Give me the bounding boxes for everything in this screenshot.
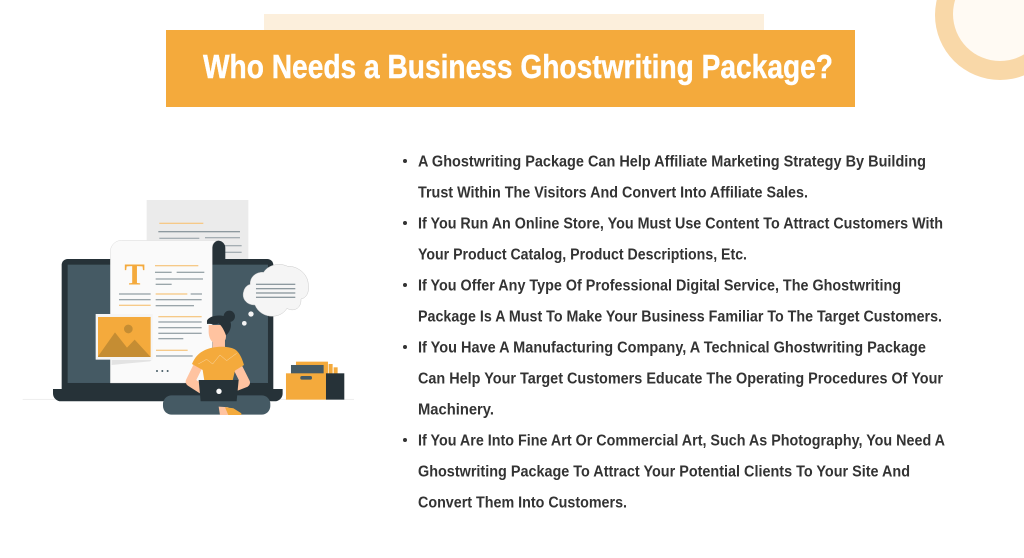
- bullet 5: fine art: Ghostwriting Package To Attract Your Potential Clients To Your Site And: [418, 464, 910, 480]
- back page: [147, 200, 248, 263]
- shirt: [192, 347, 244, 381]
- bullet 5: fine art: If You Are Into Fine Art Or Commercial Art, Such As Photography, You Need A: [418, 432, 945, 450]
- ground line: [23, 398, 354, 401]
- bullet 5: fine art: Convert Them Into Customers.: [418, 494, 627, 512]
- hair: [207, 316, 231, 335]
- bullet 1: affiliate marketing: A Ghostwriting Package Can Help Affiliate Marketing Strategy By Building: [418, 154, 926, 170]
- letter T: T: [124, 258, 145, 292]
- bullet list: [403, 154, 945, 512]
- corner circle decoration: [935, 0, 1024, 80]
- illustration: writer with laptop and document: [23, 200, 354, 415]
- bullet 1: affiliate marketing: Trust Within The Visitors And Convert Into Affiliate Sales.: [418, 184, 808, 202]
- laptop: [53, 259, 283, 401]
- neck: [213, 338, 225, 353]
- bullet 1: affiliate marketing: [403, 154, 926, 202]
- arms: [190, 367, 202, 389]
- title backing strip: [264, 14, 764, 34]
- title: Who Needs a Business Ghostwriting Package?: [203, 48, 833, 85]
- bullet 4: manufacturing: Can Help Your Target Customers Educate The Operating Procedures Of Your: [418, 370, 943, 388]
- bullet 5: fine art: [403, 432, 945, 512]
- bullet 4: manufacturing: If You Have A Manufacturing Company, A Technical Ghostwriting Package: [418, 340, 926, 356]
- legs: [163, 395, 270, 415]
- folder box: [286, 362, 344, 400]
- bullet 3: digital service: Package Is A Must To Make Your Business Familiar To The Target Customers.: [418, 308, 942, 326]
- bullet 3: digital service: [403, 278, 942, 326]
- woman with laptop: [163, 311, 270, 415]
- title banner: [166, 30, 855, 107]
- small laptop: [199, 380, 239, 401]
- bullet 3: digital service: If You Offer Any Type Of Professional Digital Service, The Ghostwriting: [418, 278, 901, 294]
- thought bubble: [242, 264, 309, 326]
- bullet 4: manufacturing: Machinery.: [418, 402, 494, 418]
- picture card icon: [96, 314, 153, 365]
- head: [209, 325, 226, 344]
- bullet 4: manufacturing: [403, 340, 943, 418]
- bullet 2: online store: If You Run An Online Store, You Must Use Content To Attract Customers With: [418, 216, 943, 232]
- bullet 2: online store: Your Product Catalog, Product Descriptions, Etc.: [418, 246, 747, 264]
- bullet 2: online store: [403, 216, 943, 264]
- front document: [110, 240, 225, 383]
